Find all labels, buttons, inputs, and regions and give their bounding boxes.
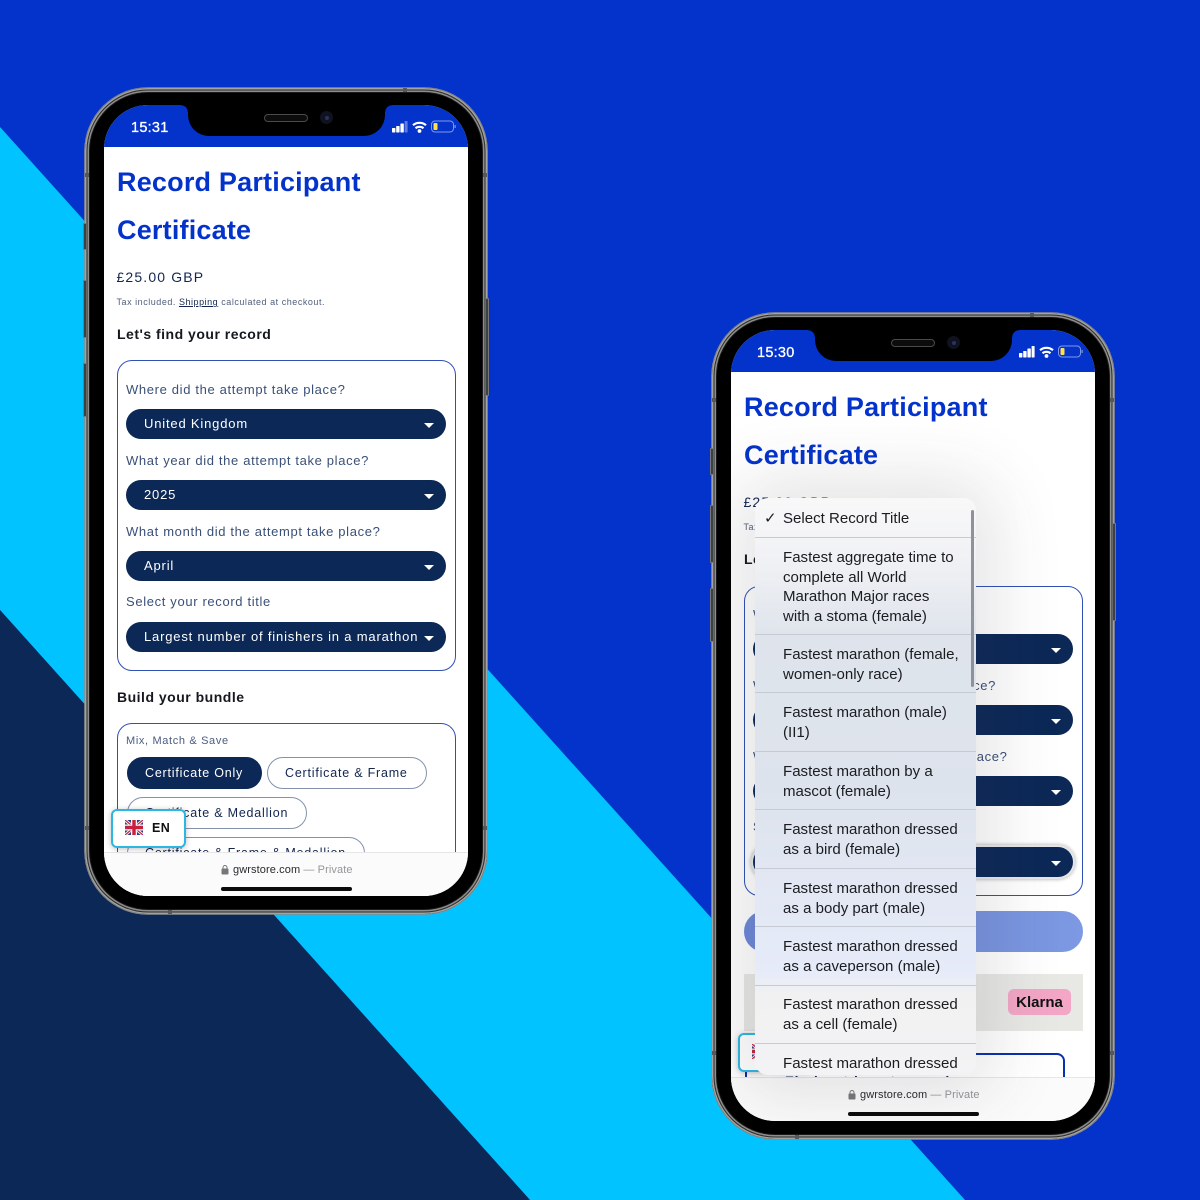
language selector	[111, 809, 186, 848]
dropdown: month: April	[771, 783, 801, 798]
dropdown: record title: Largest number of finishers in a marathon	[144, 629, 418, 644]
tax note: Tax included. Shipping calculated at checkout.	[116, 297, 325, 307]
label: year: What year did the attempt take place?	[753, 678, 996, 693]
dropdown menu: record titles	[755, 498, 976, 1075]
option: cell	[783, 996, 958, 1032]
payment strip	[744, 974, 1083, 1031]
option: certificate only: Certificate Only	[145, 766, 243, 780]
option: certificate, frame and medallion: Certificate & Frame & Medallion	[145, 846, 346, 860]
label: place: Where did the attempt take place?	[753, 607, 972, 622]
notch	[188, 105, 385, 136]
option: stoma record: complete all World	[783, 568, 906, 586]
dropdown: record title, focused	[753, 847, 1073, 877]
status bar	[104, 105, 468, 147]
option: partially visible: Fastest marathon dressed	[783, 1055, 958, 1072]
option: mascot: Fastest marathon by a	[783, 763, 933, 780]
time: 15:31	[131, 120, 169, 136]
option: male II1: Fastest marathon (male)	[783, 704, 947, 721]
screen: right phone	[731, 330, 1095, 1121]
phone: left, record search form	[85, 88, 487, 914]
option: body part: as a body part (male)	[783, 900, 925, 916]
dropdown: year	[126, 480, 446, 510]
panel: record finder	[744, 586, 1083, 896]
tax note: Tax included. Shipping calculated at checkout.	[744, 522, 952, 532]
option: women-only race: Fastest marathon (female,	[783, 646, 959, 663]
label: record title: Select your record title	[753, 819, 898, 834]
dropdown: country: United Kingdom	[771, 641, 875, 656]
option: certificate and frame	[267, 757, 427, 789]
heading: find your record: Let's find your record	[117, 326, 271, 342]
screen: left phone	[104, 105, 468, 896]
heading: build your bundle: Build your bundle	[117, 689, 244, 705]
option: stoma record: with a stoma (female)	[783, 608, 927, 624]
Klarna badge	[1008, 989, 1071, 1015]
browser address bar	[731, 1077, 1095, 1121]
option: bird	[783, 821, 958, 858]
option: women-only race: women-only race)	[783, 666, 903, 682]
info panel	[745, 1053, 1065, 1113]
price: £25.00 GBP	[116, 269, 204, 285]
option: male II1	[783, 704, 947, 740]
dropdown: country: United Kingdom	[144, 416, 248, 431]
option: certificate only	[127, 757, 262, 789]
status icons	[1019, 346, 1083, 358]
option: bird: as a bird (female)	[783, 840, 900, 858]
option: mascot	[783, 763, 933, 800]
checkmark: ✓	[764, 509, 777, 527]
dropdown: year: 2025	[771, 712, 803, 727]
option: cell: Fastest marathon dressed	[783, 996, 958, 1013]
option: cell: as a cell (female)	[783, 1016, 898, 1032]
time: 15:30	[757, 345, 795, 361]
option: stoma record	[783, 549, 954, 624]
Klarna badge: Klarna	[1016, 994, 1063, 1011]
dropdown: year	[753, 705, 1073, 735]
product title: Record Participant	[117, 167, 361, 197]
option: male II1: (II1)	[783, 724, 810, 740]
option: stoma record: Marathon Major races	[783, 588, 929, 605]
label: year: What year did the attempt take place?	[126, 453, 369, 468]
option: caveperson: Fastest marathon dressed	[783, 938, 958, 955]
option: stoma record: Fastest aggregate time to	[783, 549, 954, 566]
option: certificate and medallion: Certificate & Medallion	[145, 806, 288, 820]
dropdown: country	[126, 409, 446, 439]
phone: right, record title picker	[712, 313, 1114, 1139]
option: bird: Fastest marathon dressed	[783, 821, 958, 838]
product title: Record Participant	[744, 392, 988, 422]
panel: record finder	[117, 360, 456, 671]
status icons	[392, 120, 456, 133]
option: caveperson: as a caveperson (male)	[783, 958, 940, 974]
option: body part: Fastest marathon dressed	[783, 880, 958, 897]
url: gwrstore.com — Private	[860, 1089, 980, 1101]
dropdown: month	[753, 776, 1073, 806]
status bar	[731, 330, 1095, 372]
dropdown: record title, focused: Select Record Title	[771, 854, 896, 869]
scrollbar	[971, 510, 974, 687]
language selector	[738, 1033, 813, 1072]
language selector: EN	[152, 821, 170, 835]
add to cart button	[744, 911, 1083, 952]
dropdown: month: April	[144, 558, 174, 573]
label: mix match and save: Mix, Match & Save	[126, 735, 229, 747]
heading: find your record: Let's find your record	[744, 551, 898, 567]
product title second line: Certificate	[117, 215, 251, 245]
option: certificate and medallion	[127, 797, 307, 829]
label: month: What month did the attempt take place?	[126, 524, 380, 539]
notch	[815, 330, 1012, 361]
label: month: What month did the attempt take place?	[753, 749, 1008, 764]
dropdown: year: 2025	[144, 487, 176, 502]
option: body part	[783, 880, 958, 916]
dropdown: country	[753, 634, 1073, 664]
option: certificate, frame and medallion	[127, 837, 365, 869]
label: place: Where did the attempt take place?	[126, 382, 345, 397]
label: record title: Select your record title	[126, 594, 271, 609]
dropdown: month	[126, 551, 446, 581]
option: mascot: mascot (female)	[783, 782, 891, 800]
option: women-only race	[783, 646, 959, 682]
dropdown: record title	[126, 622, 446, 652]
browser address bar	[104, 852, 468, 896]
option: select record title: Select Record Title	[783, 510, 909, 527]
panel: bundle options	[117, 723, 456, 913]
option: certificate and frame: Certificate & Frame	[285, 766, 408, 780]
url: gwrstore.com — Private	[233, 864, 353, 876]
product title second line: Certificate	[744, 440, 878, 470]
info panel text: Find out how to purchase your	[785, 1073, 1021, 1089]
option: caveperson	[783, 938, 958, 974]
price: £25.00 GBP	[744, 494, 831, 510]
